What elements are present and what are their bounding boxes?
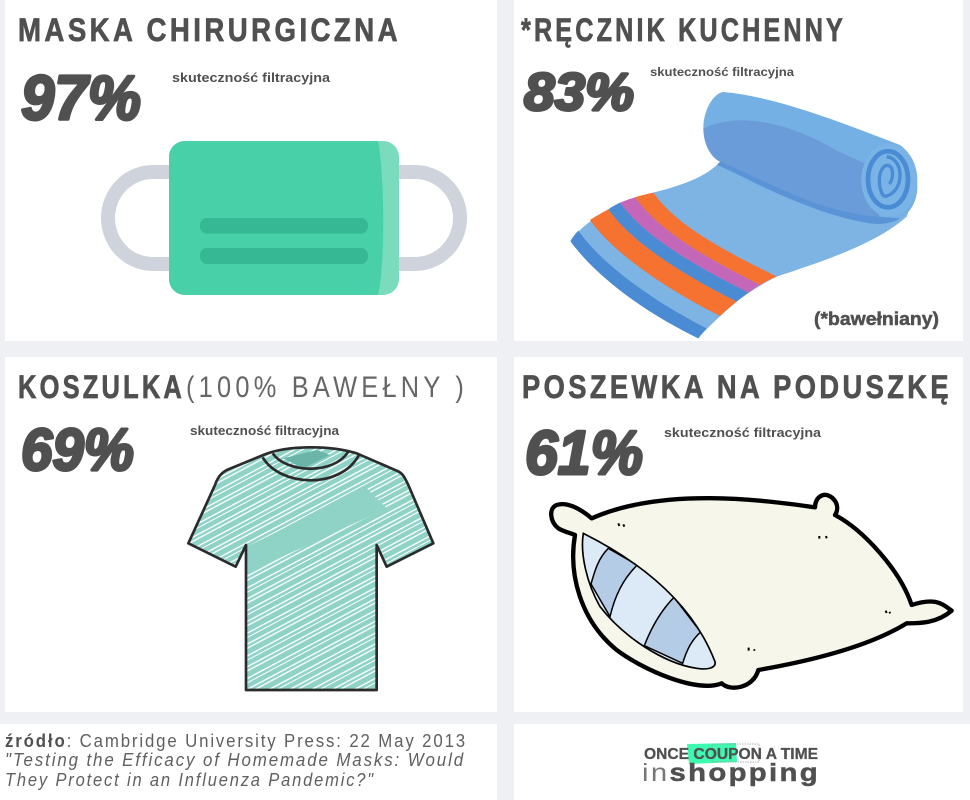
percentage: 69%: 69% — [21, 417, 134, 483]
heading: surgical mask: MASKA CHIRURGICZNA — [18, 12, 401, 48]
panel: source — [0, 724, 497, 800]
label: filtration efficiency: skuteczność filtracyjna — [650, 65, 794, 79]
icon: rolled towel — [571, 92, 917, 338]
percentage: 83%: 83% — [524, 63, 634, 122]
logo: once coupon a time inshopping — [642, 743, 820, 787]
heading suffix: 100% cotton: (100% BAWEŁNY ) — [186, 371, 468, 404]
label: filtration efficiency: skuteczność filtracyjna — [172, 70, 331, 85]
panel: pillowcase — [514, 357, 963, 712]
logo: once coupon a time inshopping: ONCE COUPON A TIME — [644, 746, 818, 763]
label: filtration efficiency: skuteczność filtracyjna — [190, 423, 340, 438]
logo: once coupon a time inshopping: inshopping — [642, 759, 820, 787]
icon: surgical mask — [108, 141, 460, 295]
panel: logo — [514, 724, 970, 800]
source text: They Protect in an Influenza Pandemic?" — [5, 770, 375, 790]
source text: "Testing the Efficacy of Homemade Masks: Would — [5, 750, 465, 770]
heading: t-shirt: KOSZULKA — [18, 369, 185, 405]
percentage: 97%: 97% — [21, 64, 141, 134]
icon: pillow — [551, 495, 952, 688]
heading: kitchen towel: *RĘCZNIK KUCHENNY — [521, 12, 846, 48]
panel: kitchen towel — [514, 0, 963, 341]
panel: surgical mask — [5, 0, 497, 341]
icon: hatched t-shirt — [186, 446, 435, 692]
label: filtration efficiency: skuteczność filtracyjna — [664, 425, 822, 440]
percentage: 61%: 61% — [525, 419, 643, 488]
source text: źródło: Cambridge University Press: 22 May 2013 — [5, 731, 467, 751]
panel: t-shirt — [5, 357, 497, 712]
source text — [5, 731, 467, 790]
note: cotton: (*bawełniany) — [814, 309, 939, 329]
